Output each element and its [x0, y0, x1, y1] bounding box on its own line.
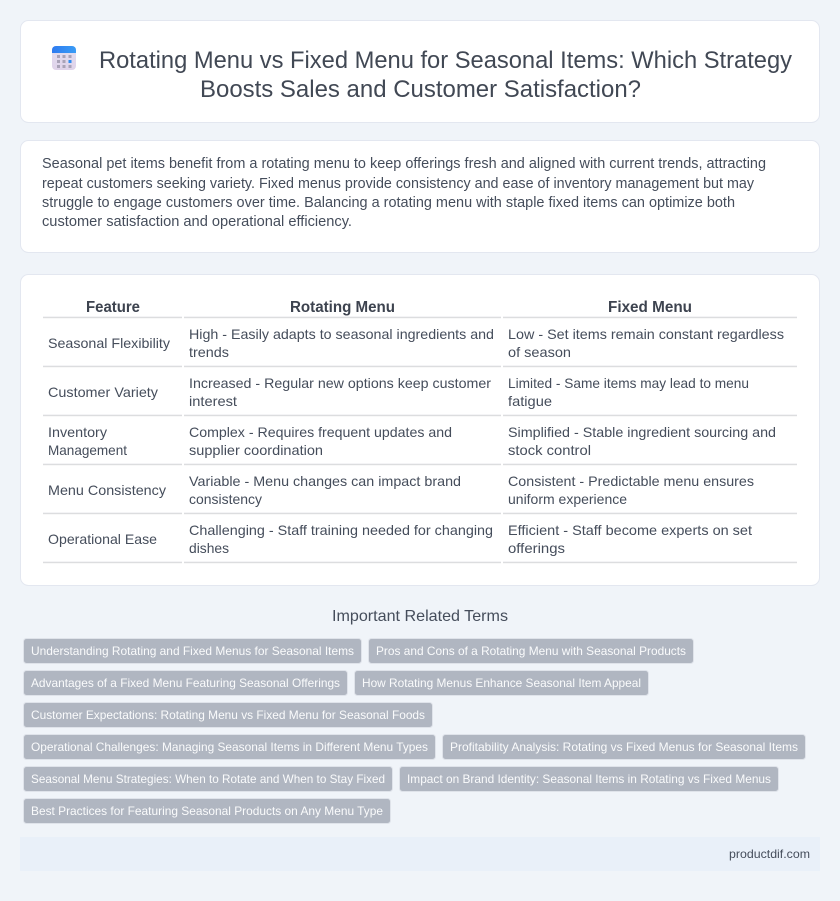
summary text: struggle to engage customers over time. Balancing a rotating menu with staple fixed items can optimize both — [42, 195, 735, 211]
tag: Profitability Analysis: Rotating vs Fixed Menus for Seasonal Items — [450, 740, 798, 754]
row: operational ease: Challenging - Staff training needed for changing — [189, 522, 493, 538]
tag — [442, 734, 806, 760]
row: customer variety: fatigue — [508, 393, 552, 409]
tag: Best Practices for Featuring Seasonal Products on Any Menu Type — [31, 804, 383, 818]
row: operational ease: offerings — [508, 540, 565, 556]
row: inventory management: Complex - Requires frequent updates and — [189, 424, 452, 440]
summary text: Seasonal pet items benefit from a rotating menu to keep offerings fresh and aligned with current trends, attracting — [42, 156, 766, 172]
panel: related term tags — [24, 638, 806, 824]
footer: productdif.com — [729, 847, 810, 861]
row: operational ease: dishes — [189, 540, 229, 556]
row: menu consistency: Consistent - Predictable menu ensures — [508, 473, 754, 489]
row: operational ease: Efficient - Staff become experts on set — [508, 522, 752, 538]
row: seasonal flexibility — [48, 326, 784, 360]
summary text: customer satisfaction and operational efficiency. — [42, 214, 352, 230]
tag — [400, 766, 778, 792]
tag: Operational Challenges: Managing Seasonal Items in Different Menu Types — [31, 740, 428, 754]
row: seasonal flexibility: Seasonal Flexibility — [48, 335, 170, 351]
row: seasonal flexibility: Low - Set items remain constant regardless — [508, 326, 784, 342]
row: customer variety: Limited - Same items may lead to menu — [508, 375, 749, 391]
row: customer variety — [48, 375, 749, 409]
title: Rotating Menu vs Fixed Menu for Seasonal Items: Which Strategy — [99, 47, 792, 74]
row: menu consistency: consistency — [189, 491, 262, 507]
row: inventory management: supplier coordination — [189, 442, 323, 458]
tag — [24, 766, 392, 792]
tag: How Rotating Menus Enhance Seasonal Item Appeal — [362, 676, 641, 690]
row: operational ease — [48, 522, 752, 556]
tag: Advantages of a Fixed Menu Featuring Seasonal Offerings — [31, 676, 340, 690]
summary text: repeat customers seeking variety. Fixed menus provide consistency and ease of inventory management but may — [42, 176, 755, 192]
tag — [24, 702, 432, 728]
tag — [368, 638, 694, 664]
panel: comparison table — [20, 274, 820, 586]
panel: header — [20, 20, 820, 122]
tag — [24, 638, 362, 664]
row: customer variety: interest — [189, 393, 237, 409]
heading: important related terms: Important Related Terms — [332, 608, 508, 625]
row: seasonal flexibility: trends — [189, 344, 229, 360]
row: seasonal flexibility: of season — [508, 344, 571, 360]
row: customer variety: Increased - Regular new options keep customer — [189, 375, 491, 391]
title — [99, 47, 792, 103]
tag: Pros and Cons of a Rotating Menu with Seasonal Products — [376, 644, 686, 658]
tag — [354, 670, 648, 696]
tag — [24, 670, 348, 696]
table header: Feature — [86, 299, 140, 316]
icon: calendar — [52, 46, 76, 70]
row: menu consistency: Variable - Menu changes can impact brand — [189, 473, 461, 489]
row: inventory management: Inventory — [48, 424, 107, 440]
table header — [86, 299, 692, 316]
table header: Rotating Menu — [290, 299, 395, 316]
title: Boosts Sales and Customer Satisfaction? — [200, 76, 641, 103]
row: menu consistency: uniform experience — [508, 491, 627, 507]
row: inventory management: Simplified - Stable ingredient sourcing and — [508, 424, 776, 440]
table header: Fixed Menu — [608, 299, 692, 316]
tag — [24, 734, 436, 760]
footer — [20, 837, 820, 871]
tag: Seasonal Menu Strategies: When to Rotate and When to Stay Fixed — [31, 772, 385, 786]
row: operational ease: Operational Ease — [48, 531, 157, 547]
row: menu consistency: Menu Consistency — [48, 482, 166, 498]
row: inventory management — [48, 424, 776, 458]
row: inventory management: Management — [48, 442, 127, 458]
row: seasonal flexibility: High - Easily adapts to seasonal ingredients and — [189, 326, 494, 342]
tag: Customer Expectations: Rotating Menu vs Fixed Menu for Seasonal Foods — [31, 708, 425, 722]
row: inventory management: stock control — [508, 442, 591, 458]
tag: Impact on Brand Identity: Seasonal Items in Rotating vs Fixed Menus — [407, 772, 771, 786]
panel: summary paragraph — [20, 140, 820, 252]
tag: Understanding Rotating and Fixed Menus for Seasonal Items — [31, 644, 354, 658]
summary text — [42, 156, 766, 230]
row: customer variety: Customer Variety — [48, 384, 158, 400]
tag — [24, 798, 390, 824]
row: menu consistency — [48, 473, 754, 507]
